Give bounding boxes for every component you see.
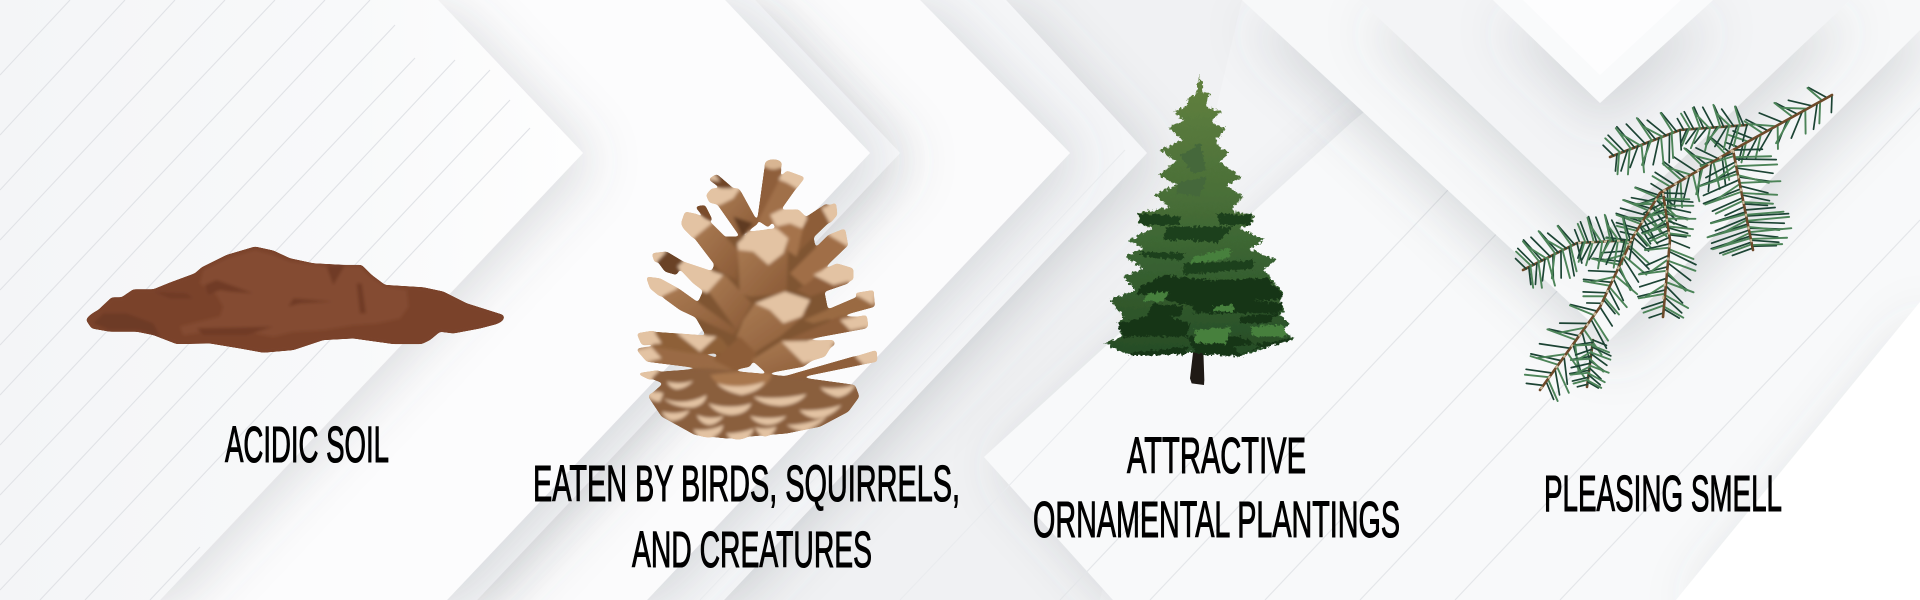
icon: soil mound bbox=[86, 247, 504, 353]
label: attractive ornamental plantings: ORNAMENTAL PLANTINGS bbox=[1033, 491, 1400, 548]
icon: evergreen tree bbox=[1103, 75, 1295, 385]
label: eaten by birds, squirrels, and creatures bbox=[533, 455, 960, 578]
label: attractive ornamental plantings: ATTRACTIVE bbox=[1127, 427, 1306, 484]
icon: pine branch bbox=[1509, 77, 1842, 409]
label: eaten by birds, squirrels, and creatures: AND CREATURES bbox=[632, 521, 872, 578]
icon: pine cone bbox=[637, 159, 877, 439]
label: attractive ornamental plantings bbox=[1033, 427, 1400, 548]
label: eaten by birds, squirrels, and creatures: EATEN BY BIRDS, SQUIRRELS, bbox=[533, 455, 960, 512]
label: acidic soil: ACIDIC SOIL bbox=[225, 416, 389, 473]
